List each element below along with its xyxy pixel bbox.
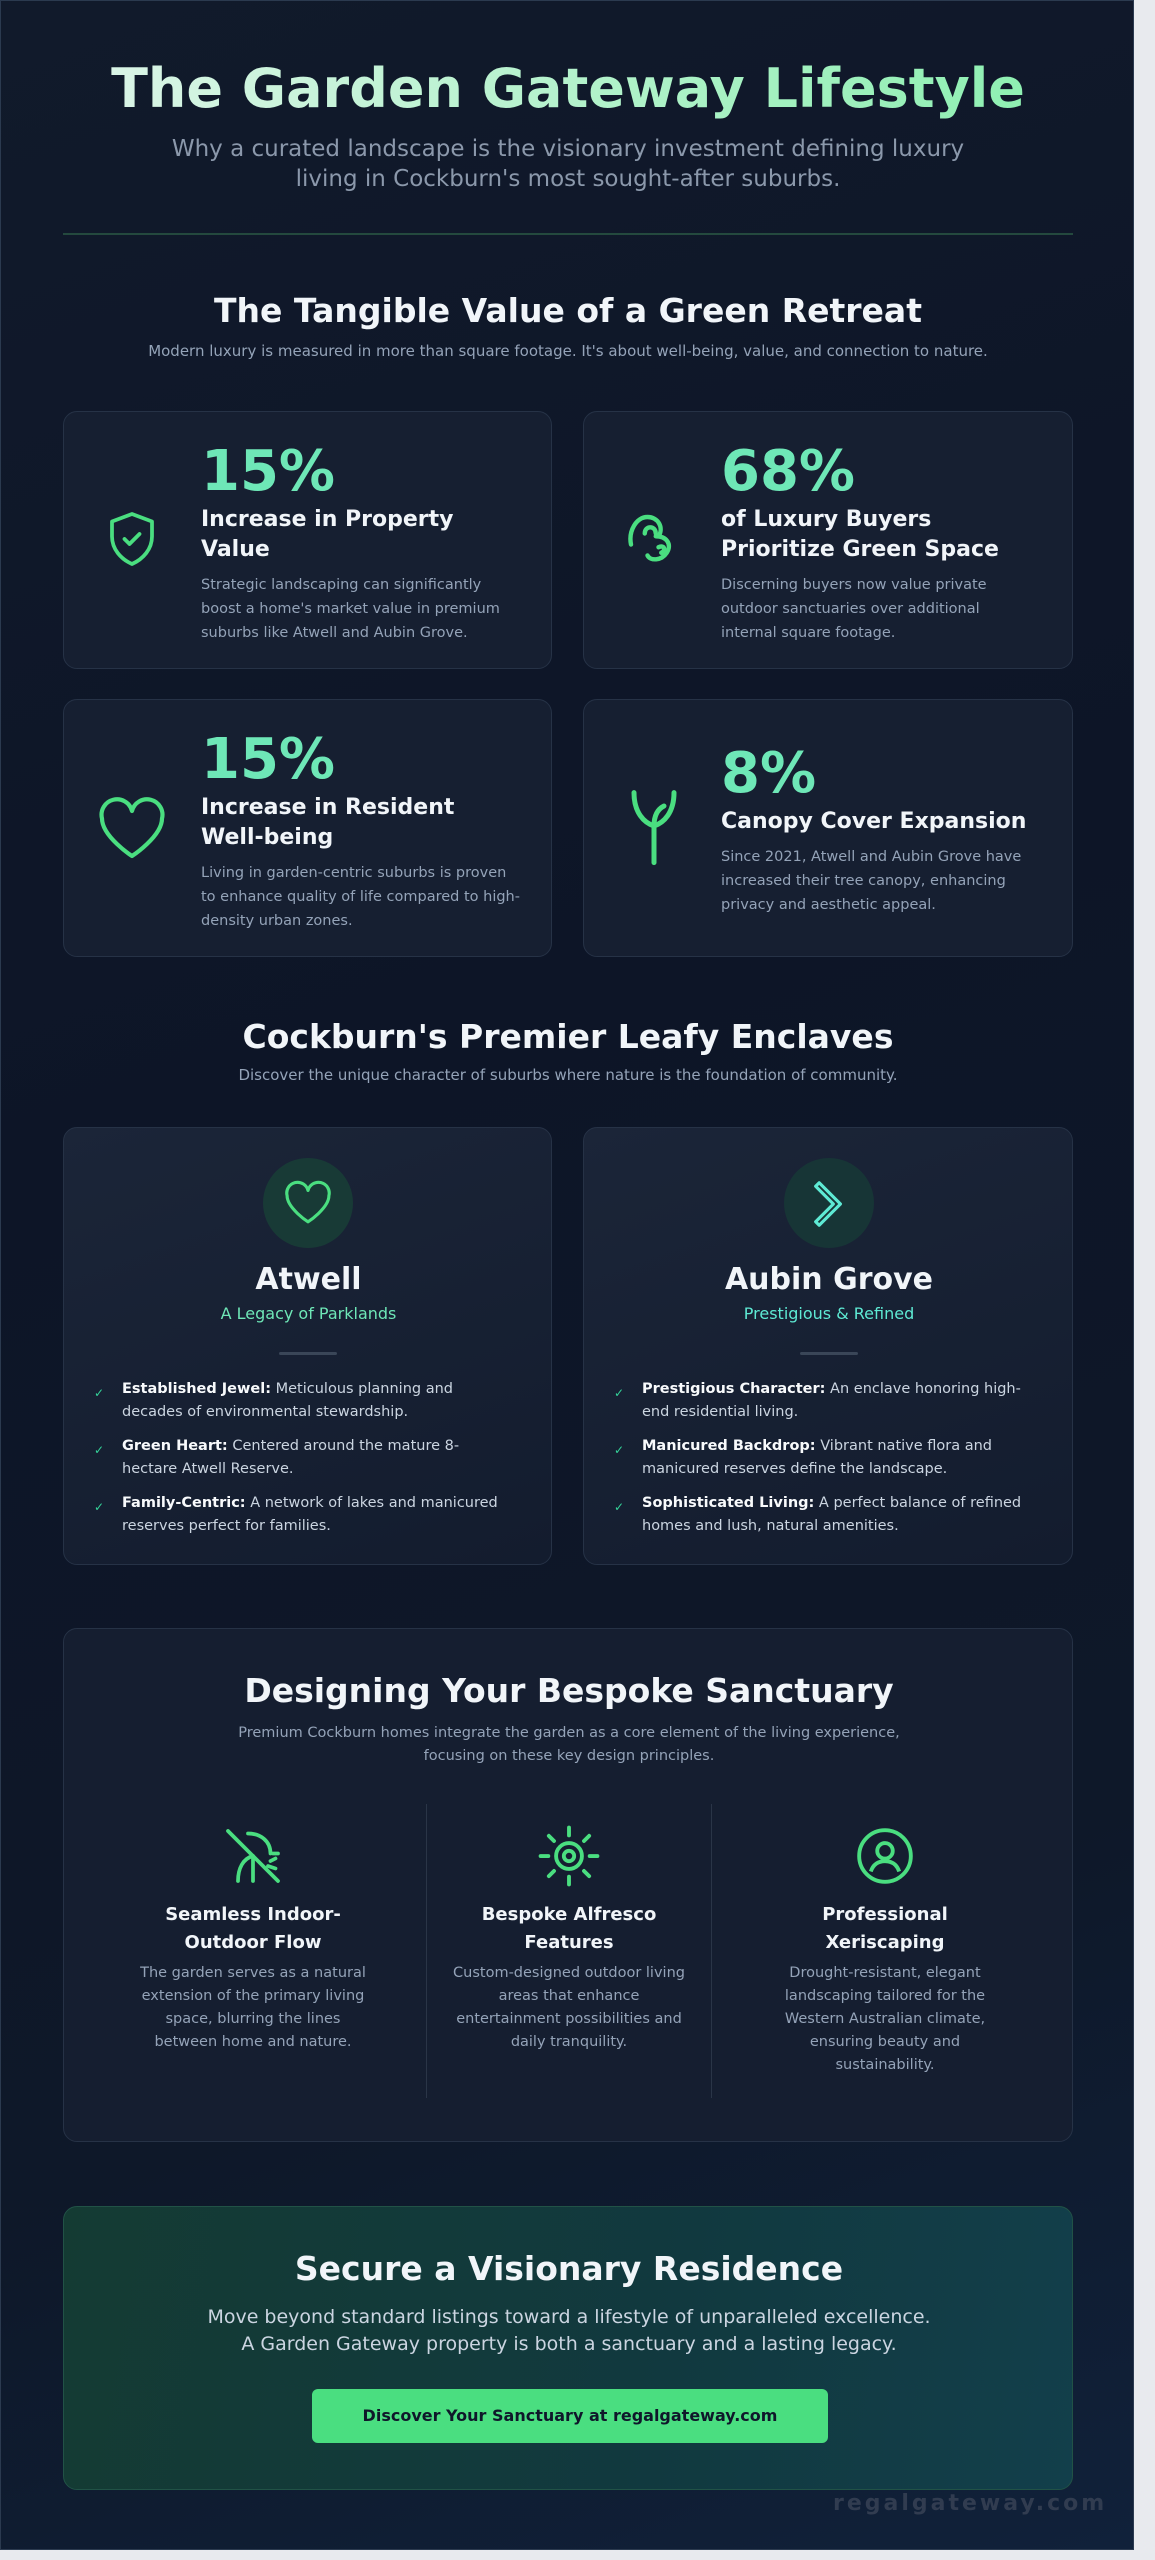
icon: person circle xyxy=(857,1828,913,1884)
stat card: well-being xyxy=(63,699,552,957)
list: Prestigious Character: An enclave honoring high-end residential living. xyxy=(642,1381,1021,1420)
subtitle: Why a curated landscape is the visionary investment defining luxury living in Cockburn's most sought-after suburbs. xyxy=(172,136,964,192)
text: A Garden Gateway property is both a sanctuary and a lasting legacy. xyxy=(241,2333,897,2355)
tagline: A Legacy of Parklands xyxy=(221,1304,396,1323)
heading: Designing Your Bespoke Sanctuary xyxy=(244,1671,894,1710)
list: Sophisticated Living: A perfect balance of refined homes and lush, natural amenities. xyxy=(642,1495,1021,1534)
footer watermark: regalgateway.com xyxy=(833,2491,1107,2516)
text: Move beyond standard listings toward a lifestyle of unparalleled excellence. xyxy=(207,2306,931,2328)
name: Atwell xyxy=(255,1262,362,1297)
panel: Aubin Grove xyxy=(583,1127,1073,1565)
column: indoor-outdoor xyxy=(140,1829,366,2050)
title: The Garden Gateway Lifestyle xyxy=(111,57,1025,120)
stat text: Strategic landscaping can significantly boost a home's market value in premium suburbs like Atwell and Aubin Grove. xyxy=(201,577,500,641)
subheading: Discover the unique character of suburbs where nature is the foundation of community. xyxy=(238,1066,898,1084)
list: Established Jewel: Meticulous planning and decades of environmental stewardship. xyxy=(122,1381,453,1420)
icon: heart circle xyxy=(263,1158,353,1248)
stat text: Since 2021, Atwell and Aubin Grove have increased their tree canopy, enhancing privacy and aesthetic appeal. xyxy=(721,849,1021,913)
column: xeriscaping: Professional xyxy=(822,1904,948,1925)
stat text xyxy=(721,741,1026,913)
icon: tree swirl xyxy=(628,514,672,562)
icon: sprout xyxy=(632,790,676,866)
icon: sun xyxy=(538,1826,600,1886)
column: xeriscaping: Xeriscaping xyxy=(826,1932,944,1953)
stat text: Increase in Resident Well-being xyxy=(201,795,454,850)
list: Manicured Backdrop: Vibrant native flora and manicured reserves define the landscape. xyxy=(642,1438,992,1477)
panel: call to action xyxy=(63,2206,1073,2490)
list: Green Heart: Centered around the mature 8-hectare Atwell Reserve. xyxy=(122,1438,459,1477)
icon: chevron circle xyxy=(784,1158,874,1248)
column: xeriscaping xyxy=(785,1828,985,2073)
stat text: Discerning buyers now value private outdoor sanctuaries over additional internal square footage. xyxy=(721,577,987,641)
stat text: 68% xyxy=(721,439,855,504)
stat text: 15% xyxy=(201,727,335,792)
icon: heart xyxy=(99,797,165,858)
button: Discover Your Sanctuary at regalgateway.com xyxy=(363,2406,777,2425)
column: alfresco: Features xyxy=(524,1932,614,1953)
stat card: property value xyxy=(63,411,552,669)
list: Family-Centric: A network of lakes and manicured reserves perfect for families. xyxy=(122,1495,498,1534)
stat text: 15% xyxy=(201,439,335,504)
stat text: Increase in Property Value xyxy=(201,507,454,562)
icon: flow xyxy=(226,1829,280,1883)
button xyxy=(312,2389,828,2443)
heading: enclaves: Cockburn's Premier Leafy Enclaves xyxy=(243,1017,893,1056)
column: alfresco xyxy=(453,1826,685,2050)
name: Aubin Grove xyxy=(725,1262,933,1297)
stat card: canopy xyxy=(583,699,1073,957)
stat text: Living in garden-centric suburbs is proven to enhance quality of life compared to high-density urban zones. xyxy=(201,865,520,929)
stat text: of Luxury Buyers Prioritize Green Space xyxy=(721,507,999,562)
subheading: Premium Cockburn homes integrate the garden as a core element of the living experience, focusing on these key design principles. xyxy=(238,1725,900,1764)
panel: Atwell xyxy=(63,1127,552,1565)
subheading: Modern luxury is measured in more than square footage. It's about well-being, value, and connection to nature. xyxy=(148,342,988,360)
heading: Secure a Visionary Residence xyxy=(295,2249,843,2288)
stat text: 8% xyxy=(721,741,816,806)
stat text: Canopy Cover Expansion xyxy=(721,809,1026,834)
panel: design principles xyxy=(63,1628,1073,2142)
column: xeriscaping: Drought-resistant, elegant landscaping tailored for the Western Australian climate, ensuring beauty and sustainability. xyxy=(785,1965,985,2073)
tagline: Prestigious & Refined xyxy=(744,1304,914,1323)
stat text xyxy=(721,439,999,641)
column: indoor-outdoor: The garden serves as a natural extension of the primary living space, blurring the lines between home and nature. xyxy=(140,1965,366,2050)
list xyxy=(616,1381,1021,1534)
column: alfresco: Custom-designed outdoor living areas that enhance entertainment possibilities and daily tranquility. xyxy=(453,1965,685,2050)
icon: shield xyxy=(110,512,154,566)
list xyxy=(96,1381,498,1534)
text xyxy=(207,2306,931,2355)
column: alfresco: Bespoke Alfresco xyxy=(482,1904,656,1925)
stat card: luxury buyers xyxy=(583,411,1073,669)
stat text xyxy=(201,439,500,641)
heading: tangible value: The Tangible Value of a Green Retreat xyxy=(214,291,922,330)
stat text xyxy=(201,727,520,929)
column: indoor-outdoor: Seamless Indoor- xyxy=(165,1904,341,1925)
column: indoor-outdoor: Outdoor Flow xyxy=(185,1932,321,1953)
